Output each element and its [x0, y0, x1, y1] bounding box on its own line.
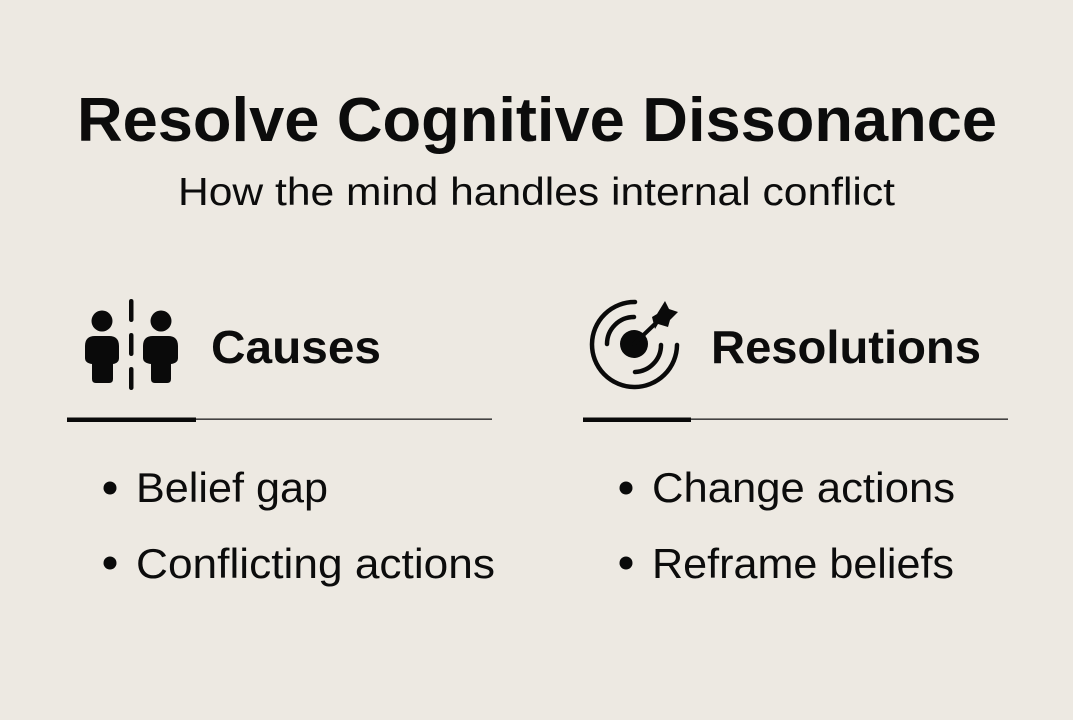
list: resolutions	[620, 464, 955, 587]
list: causes: Belief gap	[136, 464, 328, 511]
panel: resolutions	[583, 301, 1008, 587]
list: resolutions: Change actions	[652, 464, 955, 511]
list: resolutions: Reframe beliefs	[652, 540, 954, 587]
icon: target with arrow	[592, 301, 678, 387]
heading: resolutions: Resolutions	[711, 321, 981, 373]
subtitle: How the mind handles internal conflict	[178, 171, 895, 214]
list: causes	[104, 464, 495, 587]
heading: causes: Causes	[211, 321, 381, 373]
icon: two people divided	[85, 299, 178, 390]
panel: causes	[67, 299, 495, 587]
title: Resolve Cognitive Dissonance	[77, 86, 997, 155]
list: causes: Conflicting actions	[136, 540, 495, 587]
divider: resolutions	[583, 418, 1008, 422]
divider: causes	[67, 418, 492, 422]
